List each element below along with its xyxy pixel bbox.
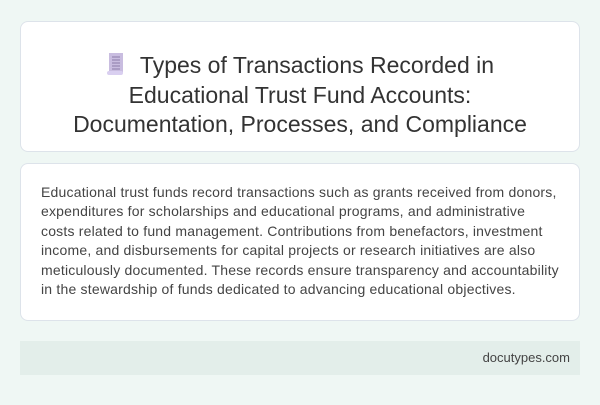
footer text: docutypes.com [483, 350, 570, 365]
panel: title card [20, 21, 580, 152]
panel: description card [20, 163, 580, 321]
text block: description: costs related to fund management. Contributions from benefactors, investment [41, 223, 543, 239]
text block: description: meticulously documented. These records ensure transparency and accountability [41, 262, 559, 278]
text block: description: in the stewardship of funds dedicated to advancing educational objectives. [41, 281, 516, 297]
text block: description: Educational trust funds record transactions such as grants received from donors, [41, 184, 557, 200]
title: Educational Trust Fund Accounts: [129, 82, 471, 108]
text block: description [41, 184, 559, 297]
text block: description: expenditures for scholarships and educational programs, and administrative [41, 203, 525, 219]
title: Types of Transactions Recorded in [140, 52, 494, 78]
footer [20, 341, 580, 375]
text block: description: income, and disbursements for capital projects or research initiatives are also [41, 242, 535, 258]
title: Documentation, Processes, and Compliance [73, 111, 527, 137]
icon: receipt [107, 53, 123, 75]
title [73, 52, 527, 137]
